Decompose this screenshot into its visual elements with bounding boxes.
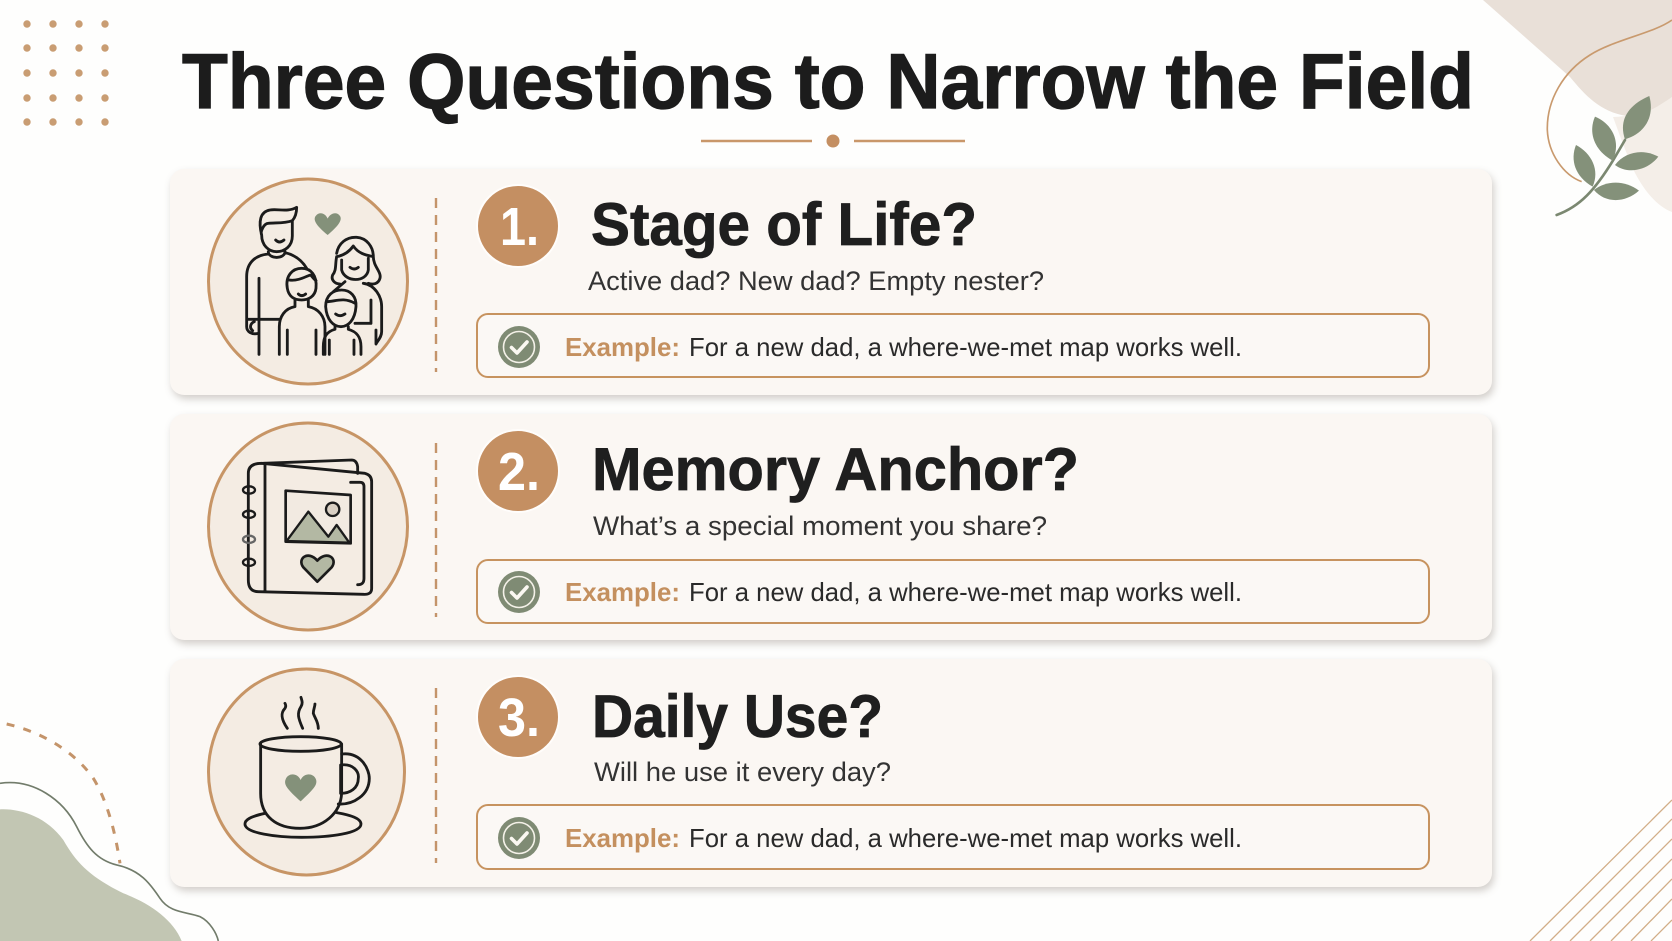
decoration: dot grid	[23, 20, 109, 126]
number badge 1	[477, 185, 559, 267]
icon: family	[208, 179, 408, 384]
decoration: top-right blobs, curve and leaf sprig	[1483, 0, 1672, 215]
icon: check	[498, 571, 540, 613]
title divider	[701, 134, 965, 148]
decoration: bottom-left blob and curves	[0, 724, 218, 941]
number badge 3: 3.	[498, 688, 540, 748]
dashed divider	[435, 688, 437, 863]
icon: check	[498, 326, 540, 368]
number badge 1: 1.	[500, 197, 539, 257]
question text: Will he use it every day?	[594, 757, 891, 787]
heading: Stage of Life?	[591, 191, 977, 258]
question text: What’s a special moment you share?	[593, 511, 1047, 541]
number badge 2	[477, 430, 559, 512]
title: Three Questions to Narrow the Field	[182, 37, 1474, 125]
number badge 2: 2.	[498, 442, 540, 502]
example text: Example:	[565, 332, 680, 362]
example text: Example:	[565, 823, 680, 853]
heading: Memory Anchor?	[592, 436, 1079, 503]
dashed divider	[435, 443, 437, 617]
example callout	[477, 314, 1429, 377]
number badge 3	[477, 676, 559, 758]
icon: coffee cup	[208, 669, 404, 875]
example text: For a new dad, a where-we-met map works well.	[689, 823, 1242, 853]
dashed divider	[435, 198, 437, 372]
icon: photo album	[208, 423, 408, 630]
icon: check	[498, 817, 540, 859]
example callout	[477, 560, 1429, 623]
panel: daily use	[170, 659, 1492, 887]
heading: Daily Use?	[592, 683, 883, 750]
example text: For a new dad, a where-we-met map works well.	[689, 332, 1242, 362]
panel: stage of life	[170, 169, 1492, 395]
panel: memory anchor	[170, 414, 1492, 640]
example text: For a new dad, a where-we-met map works well.	[689, 577, 1242, 607]
example callout	[477, 805, 1429, 869]
example text: Example:	[565, 577, 680, 607]
decoration: bottom-right diagonal lines	[1530, 800, 1672, 941]
question text: Active dad? New dad? Empty nester?	[588, 266, 1044, 296]
